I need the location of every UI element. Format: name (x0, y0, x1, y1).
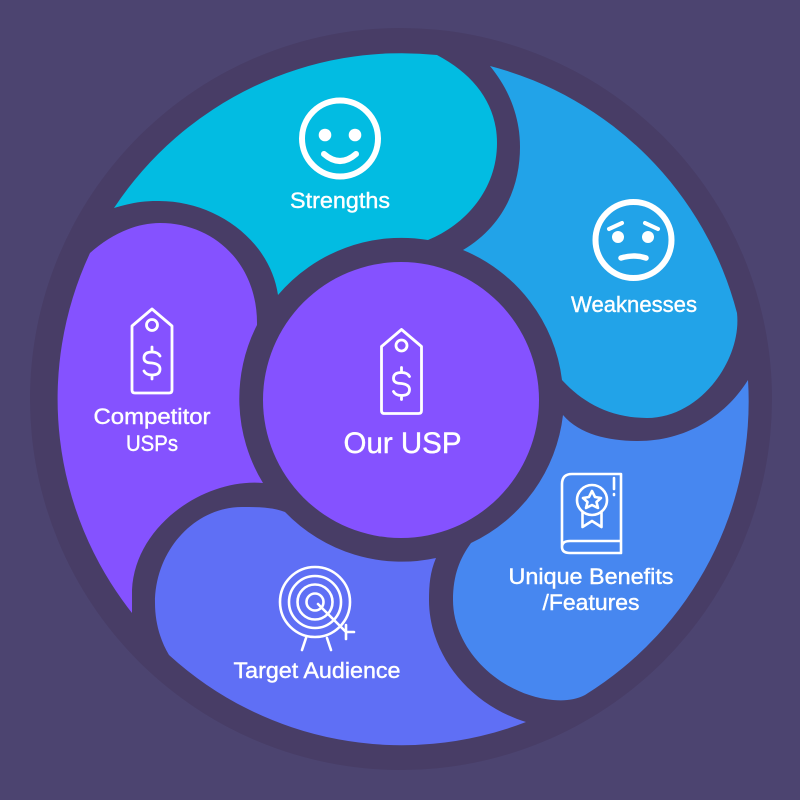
label: Unique Benefits /Features: /Features (542, 590, 640, 615)
label: Unique Benefits /Features: Unique Benefits (508, 564, 674, 589)
icon: price tag (132, 309, 172, 393)
label: Weaknesses: Weaknesses (571, 292, 697, 317)
label: Unique Benefits /Features (508, 564, 674, 615)
label: Strengths: Strengths (290, 188, 390, 213)
label: Competitor USPs: Competitor (94, 404, 210, 429)
panel: Unique Benefits /Features (453, 380, 749, 700)
label: Competitor USPs: USPs (126, 431, 178, 456)
icon: worried face (596, 202, 672, 278)
icon: book with medal (562, 474, 621, 553)
label: Target Audience: Target Audience (234, 658, 400, 683)
panel: Our USP centre circle (263, 262, 539, 538)
icon: price tag (382, 330, 422, 414)
icon: target with arrow (280, 567, 354, 650)
label: Our USP: Our USP (344, 427, 462, 460)
label: Competitor USPs (94, 404, 210, 456)
panel: Target Audience (155, 507, 526, 745)
panel: Weaknesses (463, 66, 737, 418)
panel: Competitor USPs (58, 223, 263, 613)
icon: smiley face (302, 100, 378, 176)
panel: Strengths (114, 53, 497, 295)
